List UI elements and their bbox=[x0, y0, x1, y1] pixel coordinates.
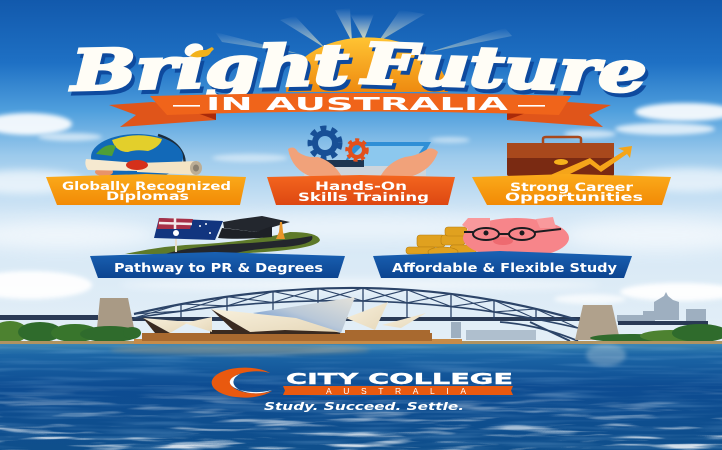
skyline bbox=[451, 292, 706, 340]
icon: piggy bank with coins bbox=[406, 217, 569, 259]
diploma scroll bbox=[85, 159, 202, 175]
card: Pathway to PR and Degrees: Pathway to PR & Degrees bbox=[114, 261, 323, 275]
ribbon banner: In Australia bbox=[109, 93, 611, 127]
icon: briefcase with growth arrow bbox=[507, 137, 632, 176]
card: Hands-On Skills Training: Hands-On bbox=[315, 179, 407, 193]
clouds bbox=[0, 103, 722, 304]
icon: hands with gears and laptop bbox=[288, 128, 438, 177]
card: Strong Career Opportunities bbox=[472, 174, 671, 205]
trees bbox=[0, 321, 722, 343]
water bbox=[0, 344, 722, 450]
card: Affordable and Flexible Study: Affordable & Flexible Study bbox=[392, 261, 617, 275]
sun with rays bbox=[215, 8, 512, 92]
title: Bright Future: Future bbox=[359, 31, 647, 106]
title: Bright Future: Bright bbox=[68, 32, 349, 104]
card: Affordable and Flexible Study bbox=[373, 251, 632, 278]
card: Hands-On Skills Training: Skills Training bbox=[298, 190, 429, 204]
card: Globally Recognized Diplomas: Diplomas bbox=[106, 189, 189, 203]
right pylon bbox=[575, 305, 620, 340]
logo: City College Australia bbox=[212, 368, 513, 398]
water reflections and foam bbox=[0, 344, 722, 450]
card: Strong Career Opportunities: Opportunities bbox=[505, 190, 643, 204]
sky background bbox=[0, 0, 722, 346]
card: Globally Recognized Diplomas: Globally Recognized bbox=[62, 179, 231, 193]
logo: City College Australia: AUSTRALIA bbox=[326, 386, 466, 396]
opera house bbox=[142, 297, 432, 341]
shoreline bbox=[0, 339, 722, 344]
card: Hands-On Skills Training bbox=[267, 175, 455, 205]
tagline: Study. Succeed. Settle. bbox=[264, 401, 464, 413]
card: Pathway to PR and Degrees bbox=[90, 252, 345, 278]
logo: City College Australia: CITY COLLEGE bbox=[286, 370, 513, 388]
title: Bright Future bbox=[68, 31, 647, 106]
harbour bridge bbox=[0, 288, 708, 341]
card: Globally Recognized Diplomas bbox=[46, 174, 246, 205]
icon: road with flag and graduation cap bbox=[125, 216, 320, 254]
ribbon banner: In Australia: IN AUSTRALIA bbox=[206, 94, 508, 115]
left pylon bbox=[97, 298, 134, 328]
logo mark bbox=[212, 368, 272, 398]
card: Strong Career Opportunities: Strong Career bbox=[510, 180, 633, 194]
icon: globe with diploma bbox=[85, 134, 202, 180]
icon: small kangaroo bbox=[190, 47, 214, 57]
